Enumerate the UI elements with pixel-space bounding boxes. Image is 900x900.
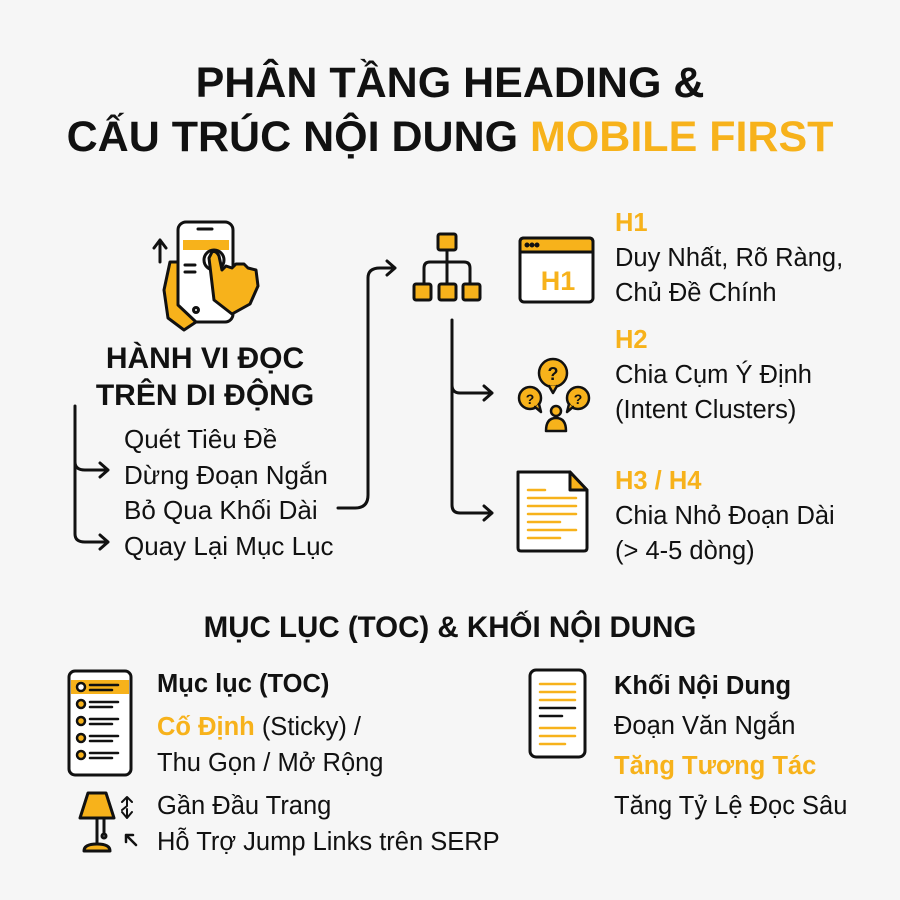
arrow: bracket from list (75, 406, 108, 549)
text: H1: Chủ Đề Chính (615, 279, 777, 307)
text: H2: H2 (615, 326, 648, 354)
arrows: tree branches (452, 320, 492, 520)
heading: mobile reading behavior: HÀNH VI ĐỌC (106, 342, 304, 375)
text: H1: H1 (615, 209, 648, 237)
title (67, 58, 833, 161)
text: H1 (615, 209, 843, 307)
text: TOC: Hỗ Trợ Jump Links trên SERP (157, 828, 500, 856)
text: TOC: Thu Gọn / Mở Rộng (157, 749, 384, 777)
title: PHÂN TẦNG HEADING & (196, 59, 704, 107)
heading: mobile reading behavior (96, 342, 314, 412)
text: H3/H4: Chia Nhỏ Đoạn Dài (615, 502, 835, 530)
icon: H1 window: H1 (541, 266, 575, 296)
icon: question people: ? (548, 364, 558, 384)
icon: document (518, 472, 587, 551)
text: H2: (Intent Clusters) (615, 396, 796, 424)
text: TOC: Gần Đầu Trang (157, 792, 331, 820)
icon: H1 window (520, 238, 593, 302)
text: H1: Duy Nhất, Rõ Ràng, (615, 244, 843, 272)
icon: site tree (414, 234, 480, 300)
icon: lamp (80, 793, 136, 851)
icon: content block (530, 670, 585, 757)
icon: question people: ? (526, 391, 534, 407)
text: content block (614, 672, 847, 820)
text: H3/H4: (> 4-5 dòng) (615, 537, 755, 565)
heading: mobile reading behavior: TRÊN DI ĐỘNG (96, 379, 314, 412)
list: reading behaviors: Dừng Đoạn Ngắn (124, 460, 328, 490)
icon: question people: ? (574, 391, 582, 407)
list: reading behaviors (124, 424, 334, 560)
icon: question people (519, 359, 589, 431)
text: content block: Tăng Tỷ Lệ Đọc Sâu (614, 792, 847, 820)
text: content block: Tăng Tương Tác (614, 752, 816, 780)
text: H3/H4 (615, 467, 835, 565)
text: TOC: Cố Định (Sticky) / (157, 713, 361, 741)
icon: phone with hand (154, 222, 258, 330)
text: H2 (615, 326, 812, 424)
section heading: TOC & content blocks: MỤC LỤC (TOC) & KHỐI NỘI DUNG (204, 611, 696, 644)
text: H3/H4: H3 / H4 (615, 467, 701, 495)
text: TOC: Mục lục (TOC) (157, 670, 329, 698)
text: TOC (157, 670, 500, 856)
list: reading behaviors: Quay Lại Mục Lục (124, 530, 334, 560)
text: H2: Chia Cụm Ý Định (615, 361, 812, 389)
list: reading behaviors: Bỏ Qua Khối Dài (124, 495, 318, 525)
list: reading behaviors: Quét Tiêu Đề (124, 424, 277, 454)
text: content block: Đoạn Văn Ngắn (614, 712, 795, 740)
title: CẤU TRÚC NỘI DUNG MOBILE FIRST (67, 113, 833, 161)
arrow: to tree (338, 261, 395, 508)
text: content block: Khối Nội Dung (614, 672, 791, 700)
icon: TOC (69, 671, 131, 775)
